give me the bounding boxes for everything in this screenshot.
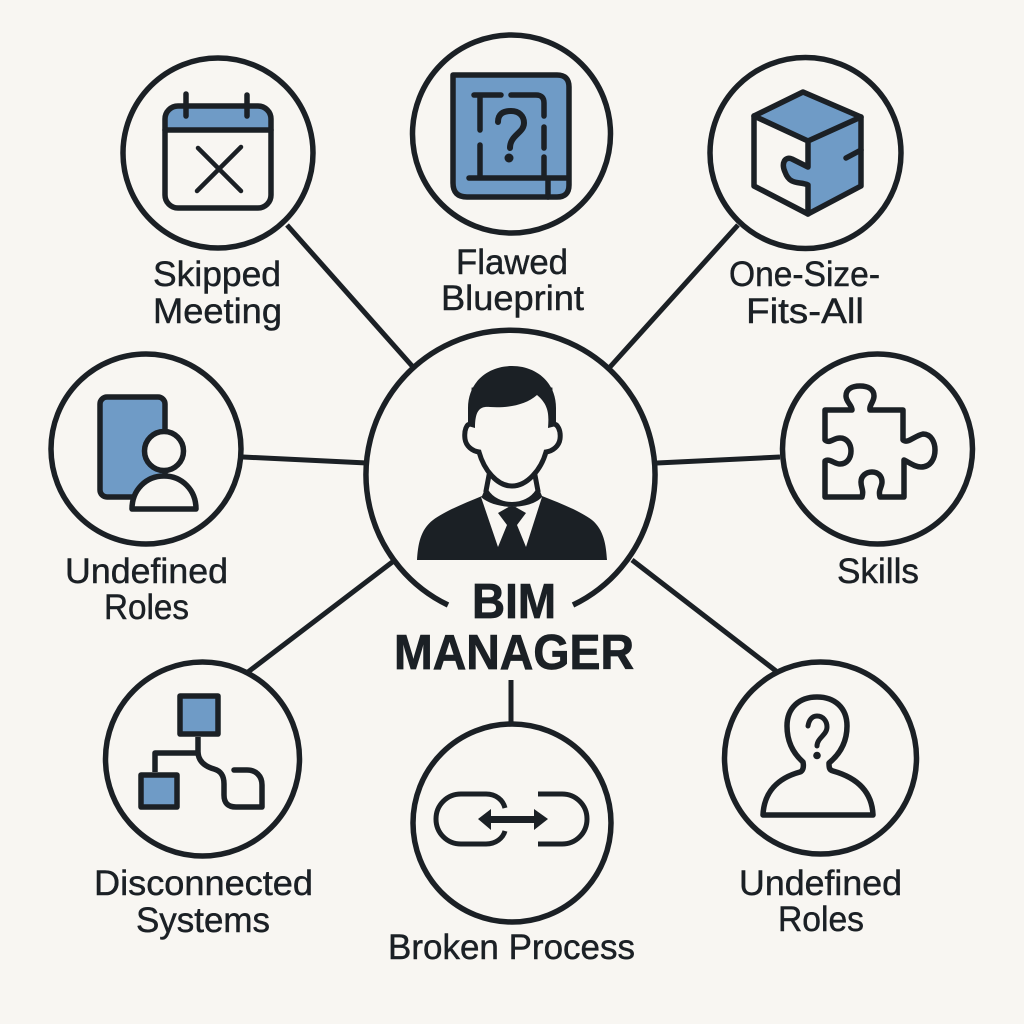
- icon: puzzle piece: [825, 386, 935, 497]
- icon: disconnected network: [141, 696, 262, 807]
- label: Skipped: [153, 255, 281, 294]
- icon: silhouette with question mark: [763, 697, 873, 815]
- label: Blueprint: [441, 279, 584, 318]
- icon: broken link with arrow: [436, 794, 587, 844]
- hub ring: [366, 330, 655, 605]
- label: Skills: [837, 552, 919, 591]
- label: [153, 255, 282, 331]
- label: Roles: [104, 588, 189, 627]
- label: Flawed: [456, 243, 568, 282]
- panel: Disconnected Systems: [94, 662, 313, 940]
- label: Undefined: [739, 864, 902, 903]
- icon: cube with puzzle notch: [752, 90, 863, 215]
- label: [729, 255, 880, 331]
- label: Disconnected: [94, 864, 313, 903]
- label: Fits-All: [746, 292, 864, 331]
- panel: Broken Process: [388, 724, 635, 967]
- label: [65, 552, 228, 627]
- icon: calendar with cross: [165, 94, 271, 208]
- label: Broken Process: [388, 928, 635, 967]
- label: [739, 864, 902, 939]
- icon: document with person: [100, 397, 196, 509]
- panel: Undefined Roles (left): [51, 354, 241, 627]
- panel: Undefined Roles (right): [724, 662, 916, 939]
- label: Roles: [778, 900, 864, 939]
- label: Meeting: [153, 292, 282, 331]
- title: BIM MANAGER: BIM: [472, 575, 556, 629]
- icon: manager portrait: [417, 366, 607, 560]
- icon: blueprint with question mark: [453, 75, 569, 197]
- panel: One-Size-Fits-All: [710, 58, 901, 331]
- label: One-Size-: [729, 255, 880, 294]
- connector lines: [243, 225, 780, 724]
- panel: Flawed Blueprint: [412, 35, 610, 318]
- label: Undefined: [65, 552, 228, 591]
- title: BIM MANAGER: MANAGER: [394, 626, 634, 680]
- panel: Skills: [782, 354, 972, 591]
- panel: Skipped Meeting: [123, 58, 313, 331]
- label: [441, 243, 584, 318]
- panel: BIM Manager hub: [366, 330, 655, 680]
- label: [94, 864, 313, 940]
- title: BIM MANAGER: [394, 575, 634, 680]
- label: Systems: [136, 901, 270, 940]
